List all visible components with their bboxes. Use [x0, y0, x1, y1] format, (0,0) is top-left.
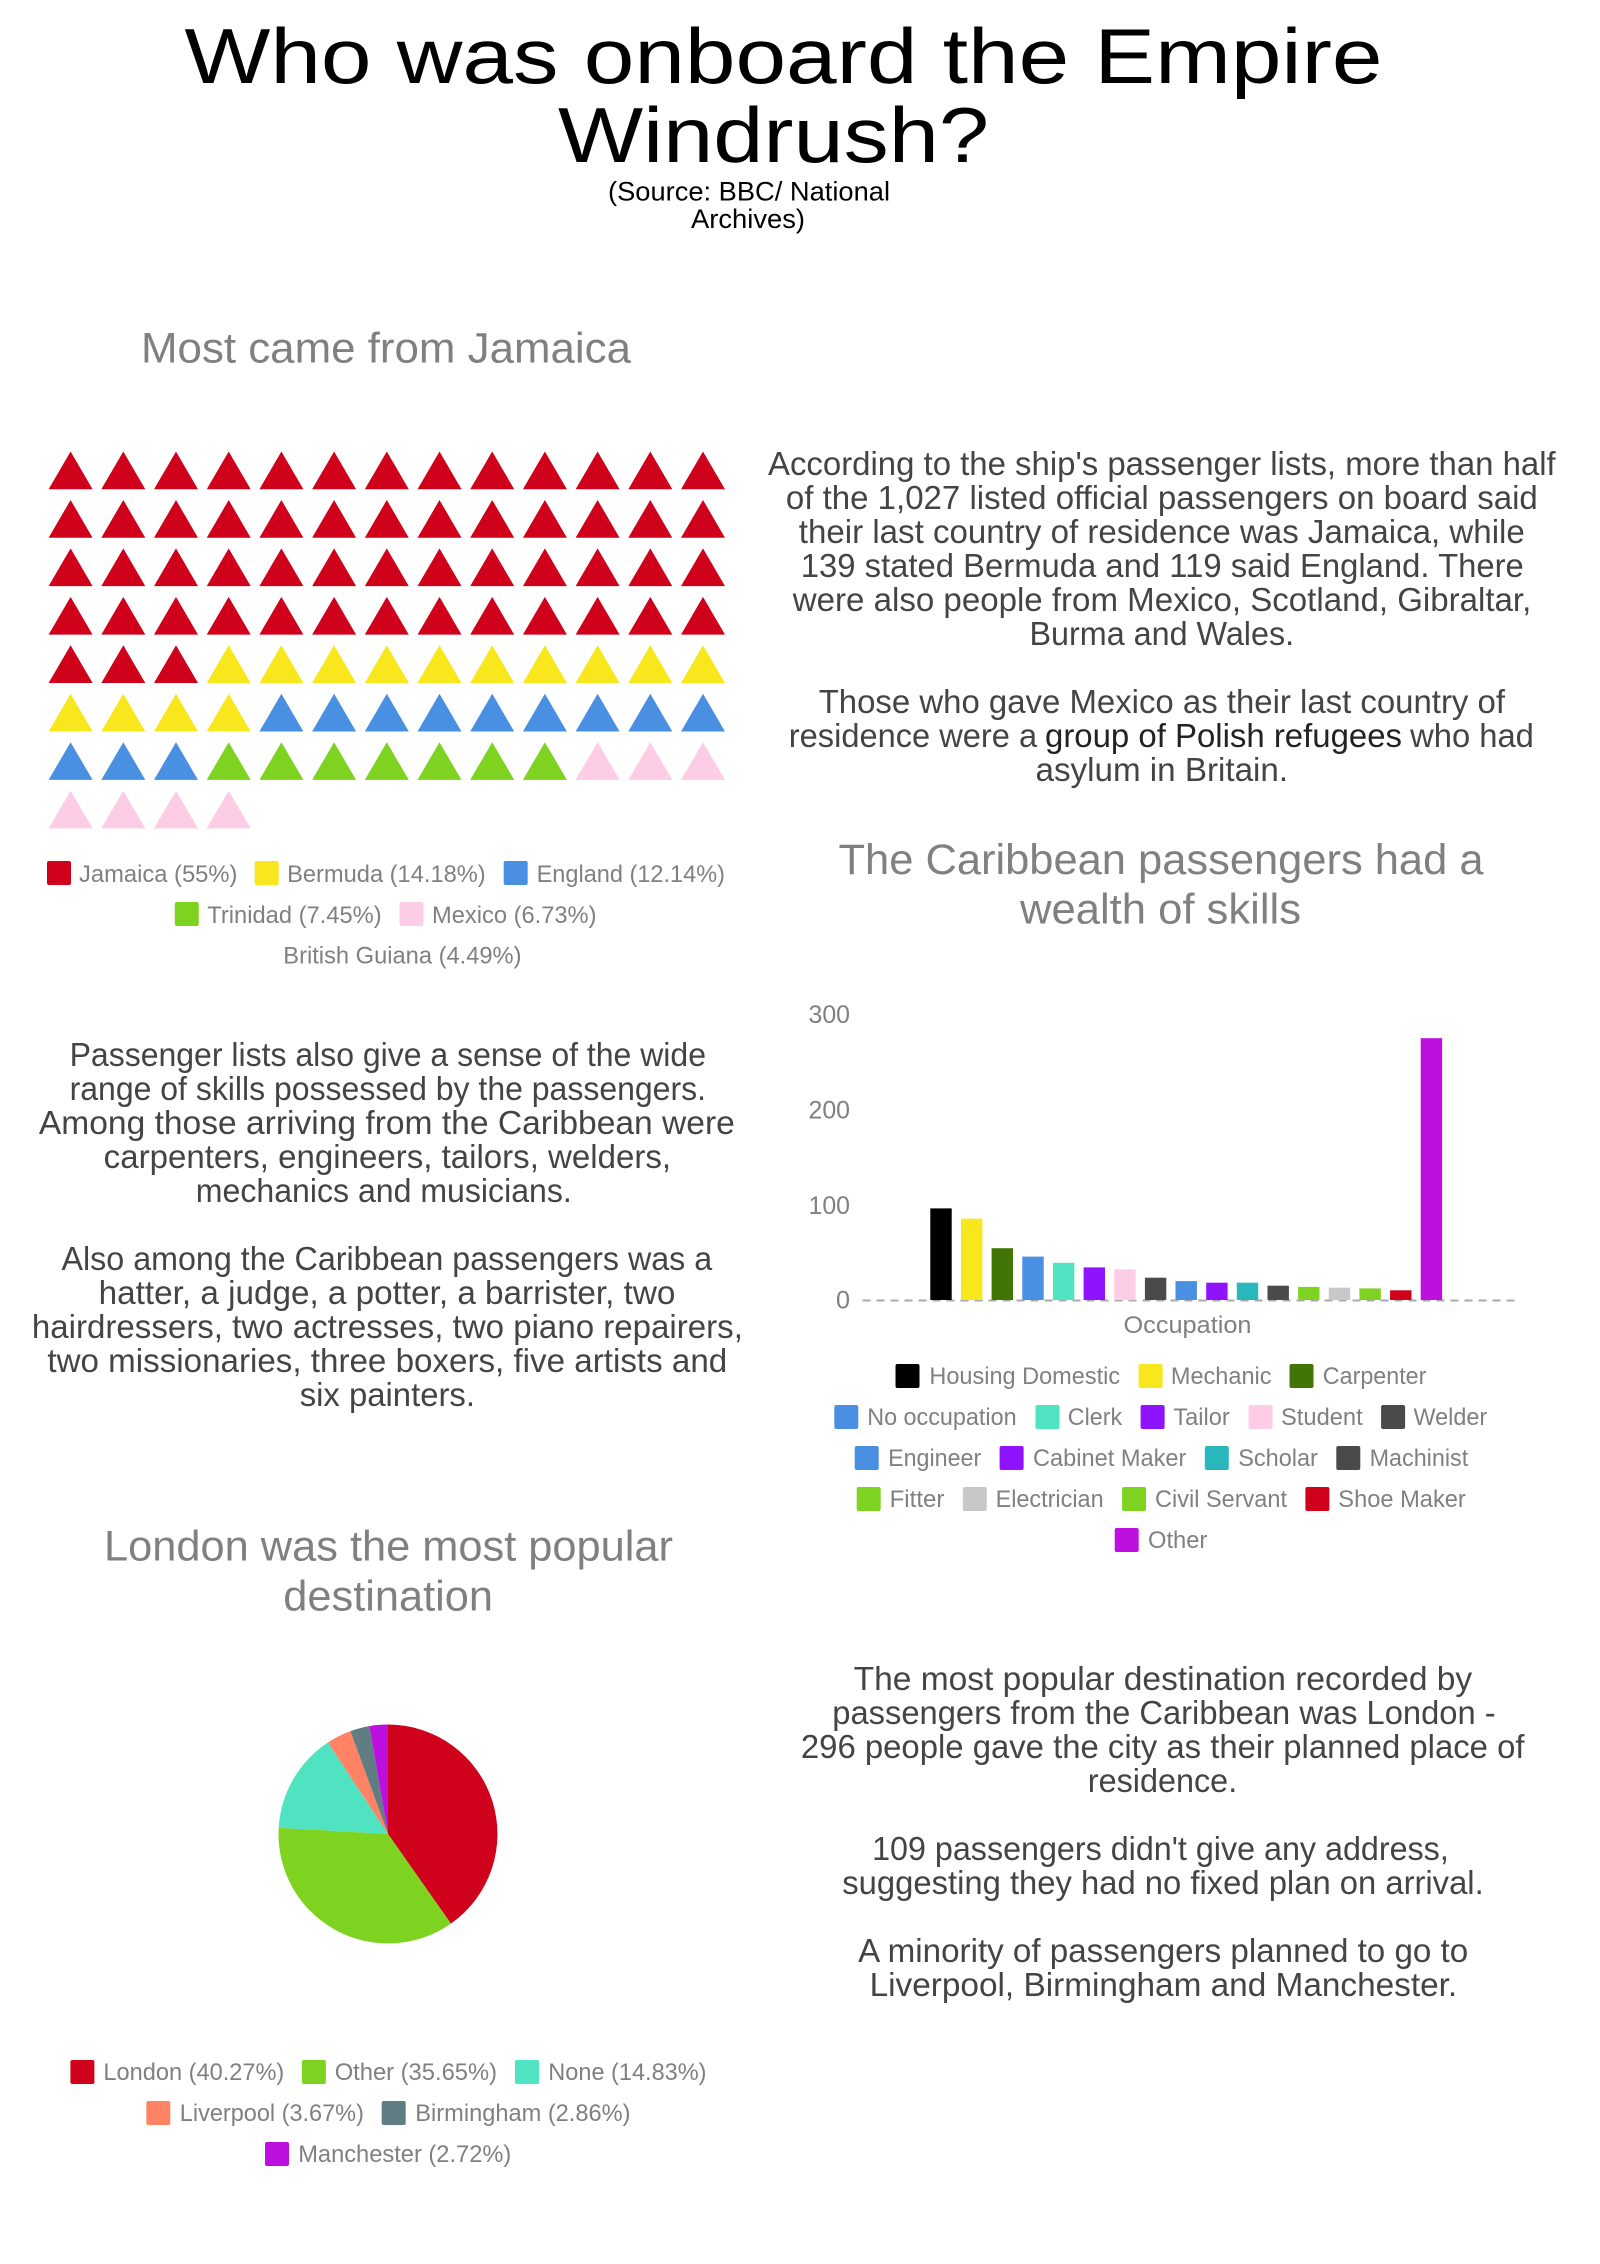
y axis labels: 200 — [808, 1096, 850, 1124]
legend: occupations: Shoe Maker — [1338, 1486, 1466, 1513]
legend: occupations: No occupation — [867, 1404, 1017, 1431]
legend: countries: England (12.14%) — [537, 861, 725, 888]
text block: passenger lists and country of residence: their last country of residence was Jamaica, while — [799, 513, 1525, 550]
triangles: England — [49, 694, 725, 780]
text block: passenger lists and country of residence: Burma and Wales. — [1030, 615, 1294, 652]
legend: occupations: Mechanic — [1171, 1363, 1272, 1390]
pictogram chart: triangles by country of residence — [49, 452, 725, 828]
text block: destinations: The most popular destination recorded by — [854, 1660, 1473, 1697]
legend: countries: Mexico (6.73%) — [432, 902, 596, 929]
legend: occupations: Electrician — [996, 1486, 1104, 1513]
text block: destinations: Liverpool, Birmingham and Manchester. — [870, 1966, 1457, 2003]
text block: passenger lists and country of residence: residence were a — [789, 717, 1038, 754]
heading: most came from Jamaica: Most came from Jamaica — [141, 324, 631, 372]
legend: countries: British Guiana (4.49%) — [283, 942, 522, 970]
slice: Birmingham — [350, 1726, 388, 1834]
text block: range of skills — [32, 1036, 743, 1413]
slice: Manchester — [369, 1724, 388, 1834]
heading: London most popular: destination — [283, 1573, 493, 1621]
text block: passenger lists and country of residence: Those who gave Mexico as their last country of — [819, 683, 1506, 720]
text block: destinations: A minority of passengers planned to go to — [858, 1932, 1468, 1969]
legend: occupations: Other — [1148, 1527, 1207, 1554]
text block: range of skills: hairdressers, two actresses, two piano repairers, — [32, 1308, 743, 1345]
text block: passenger lists and country of residence: 139 stated Bermuda and 119 said England. There — [801, 547, 1524, 584]
text block: destinations: 109 passengers didn't give any address, — [872, 1830, 1449, 1867]
legend: occupations: Carpenter — [1323, 1363, 1426, 1390]
source line — [608, 176, 890, 234]
legend: countries: Trinidad (7.45%) — [207, 902, 382, 929]
bar chart: occupations — [808, 1001, 1518, 1339]
text block: range of skills: Passenger lists also give a sense of the wide — [70, 1036, 706, 1073]
legend: occupations: Scholar — [1238, 1445, 1318, 1472]
legend: occupations: Civil Servant — [1155, 1486, 1287, 1513]
slice: Other — [279, 1828, 451, 1943]
y axis labels — [808, 1001, 850, 1314]
legend: countries: Bermuda (14.18%) — [287, 861, 486, 888]
legend: destinations: Other (35.65%) — [335, 2059, 497, 2086]
title: Windrush? — [558, 91, 989, 179]
legend: occupations — [834, 1363, 1487, 1554]
pie chart: destinations — [279, 1724, 497, 1943]
title — [184, 12, 1382, 179]
text block: passenger lists and country of residence: asylum in Britain. — [1036, 751, 1288, 788]
heading: London most popular — [104, 1523, 673, 1621]
text block: destinations: passengers from the Caribbean was London - — [832, 1694, 1496, 1731]
slice: London — [388, 1724, 497, 1924]
legend: occupations: Cabinet Maker — [1033, 1445, 1186, 1472]
text block: range of skills: mechanics and musicians. — [196, 1172, 572, 1209]
legend: destinations: London (40.27%) — [103, 2059, 284, 2086]
title: Who was onboard the Empire — [184, 12, 1382, 100]
text block: destinations — [801, 1660, 1525, 2003]
slice: None — [279, 1742, 388, 1834]
text block: range of skills: Among those arriving from the Caribbean were — [39, 1104, 735, 1141]
legend: countries: Jamaica (55%) — [79, 861, 237, 888]
text block: range of skills: two missionaries, three boxers, five artists and — [47, 1342, 727, 1379]
text block: passenger lists and country of residence: of the 1,027 listed official passengers on board said — [786, 479, 1538, 516]
heading: London most popular: London was the most popular — [104, 1523, 673, 1571]
legend: destinations: Liverpool (3.67%) — [180, 2100, 364, 2127]
legend: occupations: Engineer — [888, 1445, 981, 1472]
legend: occupations: Housing Domestic — [929, 1363, 1120, 1390]
legend: countries — [47, 861, 725, 970]
heading: Caribbean skills: The Caribbean passengers had a — [838, 836, 1484, 884]
heading: Caribbean skills — [838, 836, 1484, 934]
triangles: Trinidad — [207, 742, 567, 780]
text block: range of skills: Also among the Caribbean passengers was a — [62, 1240, 713, 1277]
text block: passenger lists and country of residence: According to the ship's passenger lists, more than half — [768, 445, 1557, 482]
source line: (Source: BBC/ National — [608, 176, 890, 206]
y axis labels: 300 — [808, 1001, 850, 1029]
text block: destinations: residence. — [1088, 1762, 1237, 1799]
y axis labels: 0 — [836, 1286, 850, 1314]
legend: occupations: Student — [1281, 1404, 1363, 1431]
y axis labels: 100 — [808, 1192, 850, 1220]
legend: destinations: Birmingham (2.86%) — [415, 2100, 630, 2127]
triangles: Mexico — [49, 742, 725, 828]
heading: Caribbean skills: wealth of skills — [1019, 886, 1301, 934]
legend: occupations: Clerk — [1068, 1404, 1123, 1431]
source line: Archives) — [691, 204, 805, 234]
bars — [930, 1038, 1442, 1300]
x axis title: Occupation — [1124, 1312, 1252, 1339]
text block: range of skills: six painters. — [300, 1376, 475, 1413]
legend: destinations: Manchester (2.72%) — [298, 2141, 511, 2168]
triangles: Jamaica — [49, 452, 725, 683]
text block: destinations: 296 people gave the city as their planned place of — [801, 1728, 1525, 1765]
legend: occupations: Fitter — [890, 1486, 944, 1513]
text block: passenger lists and country of residence: group of Polish refugees — [1045, 717, 1402, 754]
slice: Liverpool — [328, 1731, 388, 1834]
text block: passenger lists and country of residence: who had — [1409, 717, 1534, 754]
text block: passenger lists and country of residence: were also people from Mexico, Scotland, Gibraltar, — [792, 581, 1531, 618]
legend: destinations — [70, 2059, 706, 2168]
triangles: Bermuda — [49, 645, 725, 732]
text block: range of skills: carpenters, engineers, tailors, welders, — [104, 1138, 671, 1175]
text block: passenger lists and country of residence — [768, 445, 1557, 788]
text block: range of skills: range of skills possessed by the passengers. — [70, 1070, 706, 1107]
text block: range of skills: hatter, a judge, a potter, a barrister, two — [99, 1274, 675, 1311]
legend: occupations: Welder — [1414, 1404, 1487, 1431]
text block: destinations: suggesting they had no fixed plan on arrival. — [842, 1864, 1484, 1901]
legend: occupations: Tailor — [1173, 1404, 1230, 1431]
legend: destinations: None (14.83%) — [548, 2059, 706, 2086]
legend: occupations: Machinist — [1370, 1445, 1469, 1472]
